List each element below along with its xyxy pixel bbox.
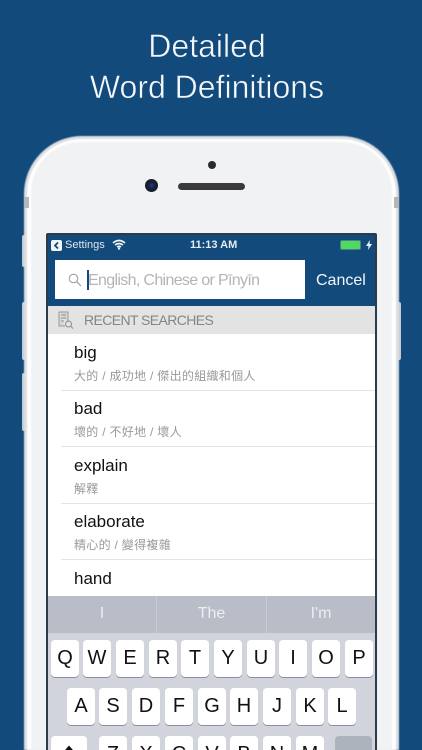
front camera	[145, 179, 158, 192]
keys row 2: H	[237, 695, 251, 717]
suggestion: I: I	[100, 605, 104, 622]
entry: hand: hand	[74, 569, 112, 588]
front sensor	[208, 161, 216, 169]
entry: elaborate: elaborate	[74, 512, 145, 531]
keys row 2: F	[173, 695, 185, 717]
keys row 1: E	[123, 647, 137, 669]
keys row 2	[67, 688, 356, 726]
battery	[340, 240, 361, 250]
search placeholder: English, Chinese or Pīnyīn	[88, 272, 259, 289]
keyboard	[48, 596, 375, 750]
keys row 1: U	[254, 647, 268, 669]
status back icon	[51, 240, 62, 251]
suggestion: The: The	[198, 605, 225, 622]
suggestion bar	[48, 596, 375, 633]
keys row 2: S	[106, 695, 120, 717]
speaker	[178, 183, 245, 190]
keys row 2: L	[336, 695, 348, 717]
charging bolt	[366, 240, 372, 250]
keys row 1: Y	[221, 647, 235, 669]
side buttons	[22, 235, 25, 267]
entry: bad: bad	[74, 399, 102, 418]
keys row 1: R	[156, 647, 170, 669]
search box	[55, 260, 305, 299]
results list background	[48, 334, 375, 596]
title: Detailed	[148, 28, 266, 64]
entry definition: explain: 解釋	[74, 482, 99, 496]
antenna bands	[24, 197, 29, 208]
status settings label: Settings	[65, 239, 105, 251]
entry: big: big	[74, 343, 97, 362]
keys row 1: O	[318, 647, 334, 669]
cancel button: Cancel	[316, 272, 366, 289]
history icon	[58, 312, 74, 329]
keys row 2: D	[139, 695, 153, 717]
clock: 11:13 AM	[190, 239, 237, 251]
recent searches header	[48, 306, 375, 334]
keys row 1	[51, 640, 373, 678]
keys row 1: T	[189, 647, 201, 669]
entry definition: bad: 壞的 / 不好地 / 壞人	[74, 425, 182, 439]
entry definition: big: 大的 / 成功地 / 傑出的組織和個人	[74, 369, 256, 383]
phone body	[24, 136, 399, 750]
text cursor	[87, 270, 89, 290]
recent searches label: RECENT SEARCHES	[84, 312, 213, 328]
entry: explain: explain	[74, 456, 128, 475]
keys row 3	[51, 736, 372, 750]
status bar and search header	[48, 235, 375, 306]
keys row 2: G	[204, 695, 220, 717]
keys row 1: P	[352, 647, 366, 669]
title	[90, 28, 324, 105]
entry definition: elaborate: 精心的 / 變得複雜	[74, 538, 171, 552]
keys row 2: A	[74, 695, 88, 717]
keys row 1: W	[88, 647, 106, 669]
keys row 2: J	[272, 695, 282, 717]
keys row 1: I	[290, 647, 296, 669]
keys row 2: K	[303, 695, 317, 717]
search icon	[68, 274, 82, 286]
suggestion: I'm: I'm	[311, 605, 331, 622]
screen	[46, 233, 377, 750]
wifi icon	[112, 240, 126, 250]
title: Word Definitions	[90, 69, 324, 105]
keys row 1: Q	[57, 647, 73, 669]
